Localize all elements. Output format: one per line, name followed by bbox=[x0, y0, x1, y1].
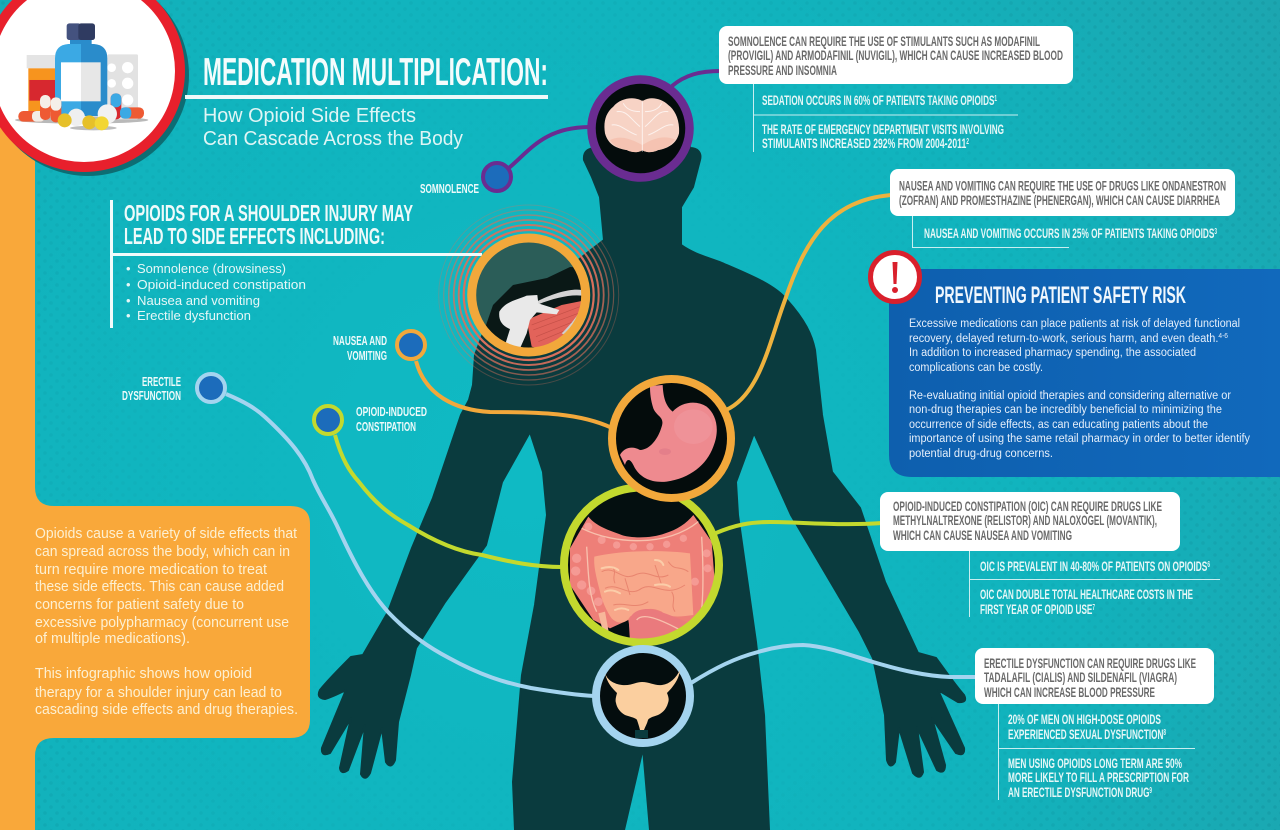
label: OPIOID-INDUCED bbox=[356, 404, 427, 419]
callout text: (PROVIGIL) AND ARMODAFINIL (NUVIGIL), WHICH CAN CAUSE INCREASED BLOOD bbox=[728, 47, 1063, 63]
label bbox=[122, 374, 181, 403]
intro text: turn require more medication to treat bbox=[35, 562, 267, 578]
stomach circle bbox=[612, 379, 731, 498]
connector: constipation bbox=[335, 435, 562, 567]
callout: nausea and vomiting bbox=[890, 169, 1235, 216]
label: VOMITING bbox=[347, 348, 387, 363]
somnolence statistics: SEDATION OCCURS IN 60% OF PATIENTS TAKING OPIOIDS bbox=[762, 92, 1161, 108]
intro text: Opioids cause a variety of side effects that bbox=[35, 526, 297, 542]
label: SOMNOLENCE bbox=[420, 181, 479, 196]
erectile dysfunction statistics: 20% OF MEN ON HIGH-DOSE OPIOIDS bbox=[1008, 711, 1161, 727]
illustration: shoulder anatomy bbox=[486, 267, 582, 348]
constipation statistics bbox=[969, 551, 1220, 617]
heading bbox=[124, 200, 413, 249]
callout text bbox=[899, 178, 1226, 208]
callout text: PRESSURE AND INSOMNIA bbox=[728, 62, 837, 78]
illustration: bladder bbox=[605, 670, 680, 730]
node: nausea and vomiting bbox=[333, 331, 425, 363]
erectile dysfunction statistics: 8 bbox=[1163, 728, 1166, 737]
orange side bar and intro panel bbox=[0, 100, 310, 830]
label: NAUSEA AND bbox=[333, 333, 387, 348]
intro text: concerns for patient safety due to bbox=[35, 597, 244, 613]
connector: nausea bbox=[416, 361, 612, 428]
connector: stomach to callout bbox=[726, 195, 891, 410]
connector: bladder to callout bbox=[691, 645, 976, 683]
intro text: cascading side effects and drug therapies. bbox=[35, 702, 298, 718]
connector: somnolence bbox=[510, 127, 590, 167]
label: CONSTIPATION bbox=[356, 419, 416, 434]
intro text: of multiple medications). bbox=[35, 631, 190, 647]
intro text bbox=[35, 526, 298, 718]
bullet list: Erectile dysfunction bbox=[137, 308, 251, 323]
somnolence statistics: 2 bbox=[966, 137, 969, 146]
label: ERECTILE bbox=[142, 374, 181, 389]
connector: erectile dysfunction bbox=[226, 394, 594, 696]
subtitle bbox=[203, 105, 463, 150]
subtitle: Can Cascade Across the Body bbox=[203, 128, 463, 150]
body text: In addition to increased pharmacy spending, the associated bbox=[909, 347, 1196, 359]
subtitle: How Opioid Side Effects bbox=[203, 105, 416, 127]
bullet list: Opioid-induced constipation bbox=[137, 277, 306, 292]
callout: opioid-induced constipation bbox=[880, 492, 1180, 551]
connector: intestines to callout bbox=[716, 522, 882, 533]
somnolence statistics: THE RATE OF EMERGENCY DEPARTMENT VISITS INVOLVING bbox=[762, 121, 1004, 137]
body text: 4-6 bbox=[1218, 333, 1228, 340]
node: erectile dysfunction bbox=[122, 374, 225, 403]
body text: potential drug-drug concerns. bbox=[909, 448, 1053, 460]
bullet list: • bbox=[126, 308, 131, 323]
shoulder circle bbox=[472, 238, 590, 360]
body text: recovery, delayed return-to-work, serious harm, and even death. bbox=[909, 333, 1235, 345]
body silhouette bbox=[319, 104, 965, 830]
intro text: excessive polypharmacy (concurrent use bbox=[35, 615, 289, 631]
bullet list: • bbox=[126, 277, 131, 292]
somnolence statistics bbox=[753, 84, 1018, 152]
illustration: intestines bbox=[570, 515, 715, 642]
body text bbox=[909, 318, 1250, 460]
medication badge bbox=[0, 0, 189, 176]
heading: LEAD TO SIDE EFFECTS INCLUDING: bbox=[124, 223, 385, 249]
heading: OPIOIDS FOR A SHOULDER INJURY MAY bbox=[124, 200, 413, 226]
title: MEDICATION MULTIPLICATION: bbox=[203, 51, 548, 94]
callout text bbox=[728, 33, 1063, 78]
body text: occurrence of side effects, as can educating patients about the bbox=[909, 419, 1208, 431]
body text: complications can be costly. bbox=[909, 362, 1043, 374]
bladder circle bbox=[596, 649, 690, 743]
constipation statistics: 7 bbox=[1092, 603, 1095, 612]
callout: erectile dysfunction bbox=[975, 648, 1214, 704]
constipation statistics: 6 bbox=[1207, 560, 1210, 569]
brain circle bbox=[592, 80, 690, 178]
icon: pill bottles and pills bbox=[15, 23, 148, 130]
nausea statistic: 3 bbox=[1214, 227, 1217, 236]
bullet list: • bbox=[126, 293, 131, 308]
somnolence statistics: 1 bbox=[994, 94, 997, 103]
erectile dysfunction statistics bbox=[998, 704, 1195, 800]
body text: Excessive medications can place patients at risk of delayed functional bbox=[909, 318, 1240, 330]
erectile dysfunction statistics: EXPERIENCED SEXUAL DYSFUNCTION bbox=[1008, 726, 1274, 742]
body text: Re-evaluating initial opioid therapies and considering alternative or bbox=[909, 390, 1231, 402]
intro text: these side effects. This can cause added bbox=[35, 579, 284, 595]
callout text: SOMNOLENCE CAN REQUIRE THE USE OF STIMULANTS SUCH AS MODAFINIL bbox=[728, 33, 1040, 49]
label bbox=[356, 404, 427, 434]
shoulder pain rings bbox=[439, 205, 619, 385]
intro text: This infographic shows how opioid bbox=[35, 666, 252, 682]
illustration: stomach bbox=[620, 385, 717, 482]
somnolence statistics: STIMULANTS INCREASED 292% FROM 2004-2011 bbox=[762, 135, 1093, 151]
intro text: therapy for a shoulder injury can lead to bbox=[35, 685, 282, 701]
callout: somnolence bbox=[719, 26, 1073, 84]
intro text: can spread across the body, which can in bbox=[35, 544, 290, 560]
erectile dysfunction statistics: AN ERECTILE DYSFUNCTION DRUG bbox=[1008, 784, 1251, 800]
callout text: WHICH CAN INCREASE BLOOD PRESSURE bbox=[984, 684, 1155, 700]
callout text bbox=[893, 498, 1162, 543]
label: DYSFUNCTION bbox=[122, 388, 181, 403]
body text: importance of using the same retail pharmacy in order to better identify bbox=[909, 433, 1250, 445]
panel: preventing patient safety risk bbox=[889, 269, 1280, 477]
bullet list: Nausea and vomiting bbox=[137, 293, 260, 308]
constipation statistics: FIRST YEAR OF OPIOID USE bbox=[980, 601, 1172, 617]
body text: non-drug therapies can be incredibly beneficial to minimizing the bbox=[909, 404, 1222, 416]
node: somnolence bbox=[420, 163, 511, 196]
title bbox=[185, 51, 548, 150]
erectile dysfunction statistics: 9 bbox=[1149, 786, 1152, 795]
bullet list: Somnolence (drowsiness) bbox=[137, 261, 286, 276]
intestines circle bbox=[564, 488, 719, 642]
label bbox=[333, 333, 387, 363]
icon: brain bbox=[604, 98, 679, 152]
panel: shoulder side effects list bbox=[110, 200, 482, 328]
nausea statistic bbox=[912, 216, 1217, 248]
callout text bbox=[984, 655, 1196, 700]
callout text: WHICH CAN CAUSE NAUSEA AND VOMITING bbox=[893, 527, 1072, 543]
icon: warning exclamation bbox=[870, 252, 920, 302]
bullet list bbox=[126, 261, 306, 323]
connector: brain to callout bbox=[672, 71, 720, 86]
bullet list: • bbox=[126, 261, 131, 276]
node: opioid-induced constipation bbox=[314, 404, 427, 434]
